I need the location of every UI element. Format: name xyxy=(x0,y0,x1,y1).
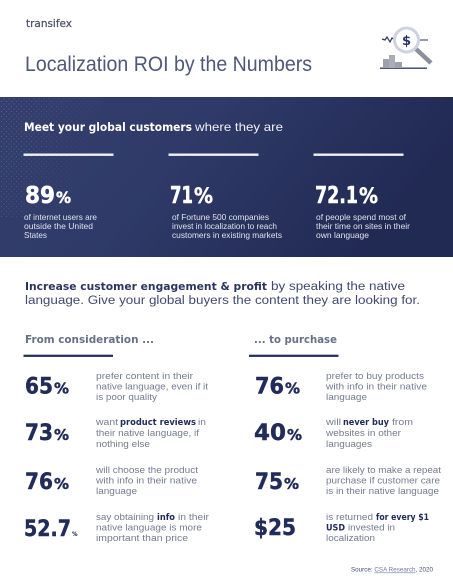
stat: 89%: States xyxy=(24,230,47,240)
stat: 52.7%: info xyxy=(157,513,175,523)
stat: 73% xyxy=(25,417,206,450)
stat: 40%: 40 xyxy=(254,421,286,446)
stat: 52.7% xyxy=(24,512,210,544)
stat: 75%: are likely to make a repeat xyxy=(326,465,441,476)
stat: 73%: nothing else xyxy=(96,439,150,450)
stat: 71%: % xyxy=(194,184,213,208)
stat: 73%: 73 xyxy=(25,421,53,446)
heading: to purchase: ... to purchase xyxy=(254,333,337,346)
stat: 76%: language xyxy=(326,392,367,403)
intro paragraph: Increase customer engagement & profit xyxy=(25,281,267,293)
heading: meet your global customers xyxy=(24,120,283,134)
stat: 76%: 76 xyxy=(25,470,53,495)
stat: 76%: with info in their native xyxy=(325,382,427,392)
stat: 65%: % xyxy=(54,380,69,398)
stat: 71%: customers in existing markets xyxy=(172,230,282,240)
stat: 72.1%: of people spend most of xyxy=(316,212,407,222)
stat: 71%: invest in localization to reach xyxy=(172,221,277,231)
stat: 72.1%: their time on sites in their xyxy=(316,221,410,231)
stat: 75%: % xyxy=(284,475,299,493)
stat: 72.1%: % xyxy=(359,184,378,208)
stat: $25: localization xyxy=(326,533,375,544)
stat: 75%: purchase if customer care xyxy=(326,476,440,486)
stat: 76% xyxy=(25,465,198,497)
stat: 40%: never buy xyxy=(343,418,389,428)
stat: 76%: 76 xyxy=(255,374,284,400)
stat: 76%: language xyxy=(96,486,137,497)
title: Localization ROI by the Numbers xyxy=(25,53,312,76)
icon: magnifier over dollar and chart: $ xyxy=(402,34,411,49)
stat: 52.7%: native language is more xyxy=(96,522,202,534)
heading: meet your global customers: Meet your global customers xyxy=(24,120,192,134)
stat: 89%: of internet users are xyxy=(24,212,97,222)
stat: 76%: prefer to buy products xyxy=(326,371,424,382)
column: to purchase xyxy=(249,333,441,544)
stat: 52.7%: say obtaining xyxy=(96,512,154,523)
stat: 40% xyxy=(254,417,413,450)
stat: 73%: their native language, if xyxy=(96,428,199,439)
stat: $25: USD xyxy=(326,524,345,534)
stat: 40%: from xyxy=(392,417,413,428)
stat: 65%: native language, even if it xyxy=(96,382,208,392)
stat: 65%: prefer content in their xyxy=(96,371,194,382)
stat: 76%: % xyxy=(285,380,300,398)
stat: 72.1%: own language xyxy=(316,230,369,240)
stat: 76%: with info in their native xyxy=(95,476,197,486)
heading: from consideration xyxy=(24,333,154,357)
intro paragraph: language. Give your global buyers the content they are looking for. xyxy=(25,295,420,307)
stat: 71% xyxy=(168,154,282,240)
stat: 75% xyxy=(255,465,441,497)
stat: 72.1%: 72.1 xyxy=(315,183,358,209)
panel: meet your global customers xyxy=(0,97,453,257)
source note: Source: CSA Research , 2020 xyxy=(351,568,434,574)
column: from consideration xyxy=(24,333,210,544)
stat: 72.1% xyxy=(314,154,410,240)
intro paragraph xyxy=(25,281,420,307)
stat: 40%: will xyxy=(325,417,341,428)
heading: to purchase xyxy=(249,333,338,357)
stat: 73%: want xyxy=(95,417,118,428)
stat: 75%: 75 xyxy=(255,470,283,495)
stat: $25: for every $1 xyxy=(376,513,429,523)
stat: $25: $25 xyxy=(254,516,296,541)
stat: 76%: % xyxy=(54,475,69,493)
stat: 71%: of Fortune 500 companies xyxy=(172,212,269,222)
stat: 89%: % xyxy=(56,188,71,207)
heading: meet your global customers: where they are xyxy=(194,120,283,134)
stat: $25: invested in xyxy=(348,522,395,534)
stat: 52.7%: in their xyxy=(178,512,210,523)
stat: 89%: outside the United xyxy=(24,221,93,231)
stat: 40%: websites in other xyxy=(325,428,402,439)
stat: 73%: product reviews xyxy=(120,418,196,428)
logo: transifex: transifex xyxy=(26,18,72,30)
stat: 89% xyxy=(24,154,114,240)
stat: 65% xyxy=(25,371,208,403)
stat: 76%: will choose the product xyxy=(95,465,198,476)
stat: 52.7%: 52.7 xyxy=(24,517,71,542)
stat: 89%: 89 xyxy=(25,183,55,209)
stat: 52.7%: % xyxy=(72,531,78,538)
icon: magnifier over dollar and chart xyxy=(380,28,431,69)
stat: $25: is returned xyxy=(326,512,373,523)
stat: 65%: 65 xyxy=(25,374,53,400)
stat: 52.7%: important than price xyxy=(96,533,188,544)
stat: 73%: % xyxy=(54,426,69,444)
stat: 76% xyxy=(255,371,427,403)
stat: 75%: is in their native language xyxy=(326,486,439,497)
stat: 73%: in xyxy=(198,417,206,428)
stat: 40%: languages xyxy=(326,439,372,450)
stat: 40%: % xyxy=(287,426,302,444)
intro paragraph: by speaking the native xyxy=(271,281,405,293)
stat: $25 xyxy=(254,512,429,544)
heading: from consideration: From consideration ... xyxy=(25,333,154,346)
stat: 71%: 71 xyxy=(170,183,193,209)
stat: 65%: is poor quality xyxy=(96,392,157,403)
